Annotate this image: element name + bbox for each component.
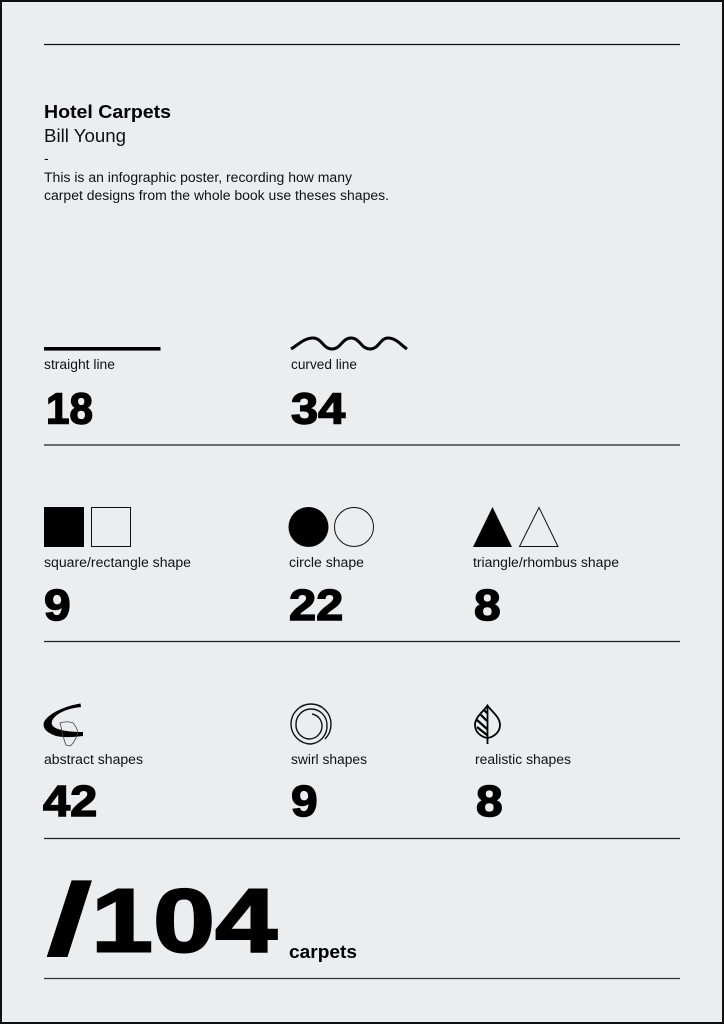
number: 9: [291, 776, 318, 826]
number: 9: [44, 580, 71, 630]
item: square/rectangle: [44, 507, 191, 630]
total: [45, 863, 357, 977]
label: swirl shapes: [291, 752, 367, 767]
label: triangle/rhombus shape: [473, 555, 619, 570]
label: realistic shapes: [475, 752, 571, 767]
author: Bill Young: [44, 126, 126, 146]
label: curved line: [291, 357, 357, 372]
icon: leaf: [475, 705, 500, 744]
number: 22: [289, 580, 343, 629]
total number: 104: [91, 871, 277, 971]
item: curved line: [291, 338, 407, 433]
icon: swirl: [291, 704, 331, 744]
description: This is an infographic poster, recording how many: [44, 170, 352, 185]
number: 42: [43, 776, 97, 825]
description: [44, 170, 389, 203]
label: circle shape: [289, 555, 364, 570]
icon: squares: [44, 507, 130, 547]
total unit: carpets: [289, 942, 357, 962]
item: realistic: [475, 705, 571, 826]
icon: abstract shape: [44, 704, 83, 746]
number: 34: [291, 384, 345, 433]
total number: /: [45, 863, 94, 977]
number: 18: [46, 385, 93, 434]
number: 8: [476, 776, 503, 826]
item: circle: [288, 507, 374, 629]
item: straight line: [44, 347, 160, 434]
icon: triangles: [473, 507, 558, 547]
item: triangle/rhombus: [473, 507, 619, 630]
dash separator: -: [44, 150, 49, 166]
icon: curved line: [291, 338, 407, 349]
label: square/rectangle shape: [44, 555, 191, 570]
label: straight line: [44, 357, 115, 372]
description: carpet designs from the whole book use theses shapes.: [44, 188, 389, 203]
item: abstract: [43, 704, 143, 825]
number: 8: [474, 580, 501, 630]
header text block: [44, 102, 389, 203]
label: abstract shapes: [44, 752, 143, 767]
icon: circles: [288, 507, 374, 547]
item: swirl: [291, 704, 367, 826]
icon: straight line: [44, 347, 160, 351]
title: Hotel Carpets: [44, 102, 171, 122]
